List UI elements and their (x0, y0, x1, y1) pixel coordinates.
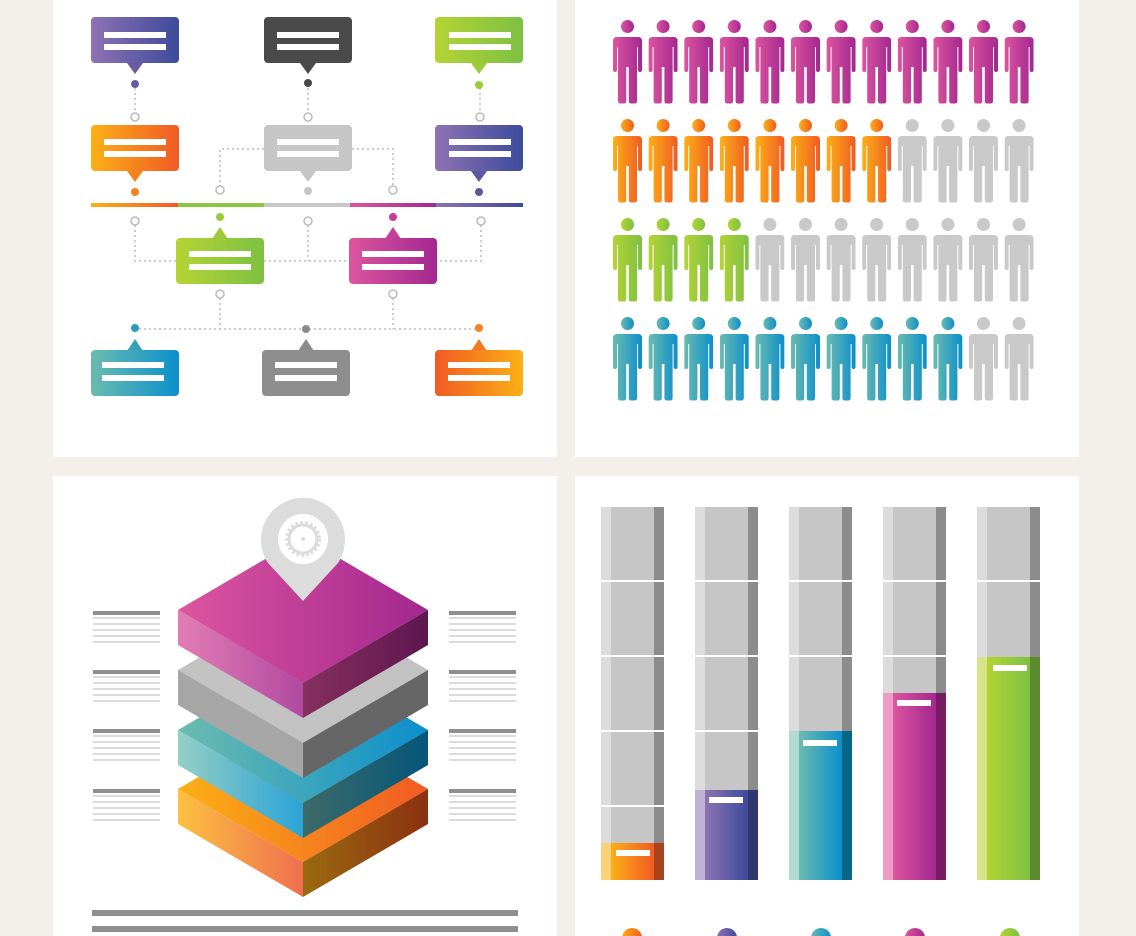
panel: people chart (575, 0, 1079, 457)
box: row4 orange (435, 324, 523, 396)
bar 2 purple (695, 507, 758, 880)
row: orange 8 of 12 (613, 119, 1034, 202)
box: row4 teal (91, 324, 179, 396)
layer: gray (178, 597, 428, 778)
grid separators (601, 580, 1040, 807)
panel: bar chart (575, 476, 1079, 936)
text blocks right (449, 611, 516, 821)
bar 4 pink (883, 507, 946, 880)
bar 3 teal (789, 507, 852, 880)
footer text lines (92, 910, 518, 932)
box: row3 green (176, 213, 264, 284)
box: row2 orange (91, 125, 179, 196)
panel: layer stack (53, 476, 557, 936)
box: row3 pink (349, 213, 437, 284)
icon: location pin with gear (261, 498, 345, 601)
box: row2 purple (435, 125, 523, 196)
panel: flowchart (53, 0, 557, 457)
layer: teal (178, 657, 428, 838)
layer: pink (178, 537, 428, 718)
legend dots (622, 928, 1020, 936)
box: row2 gray (264, 125, 352, 195)
box: row4 gray (262, 325, 350, 396)
row: green 4 of 12 (613, 218, 1034, 302)
bar 1 orange (601, 507, 664, 880)
text blocks left (93, 611, 160, 821)
box: row1 purple (91, 17, 179, 88)
row: pink 12 of 12 (613, 20, 1034, 104)
row: teal 10 of 12 (613, 317, 1034, 400)
box: row1 green (435, 17, 523, 89)
bar 5 green (977, 507, 1040, 880)
timeline line (91, 203, 523, 207)
box: row1 dark (264, 17, 352, 87)
layer: orange (178, 716, 428, 897)
